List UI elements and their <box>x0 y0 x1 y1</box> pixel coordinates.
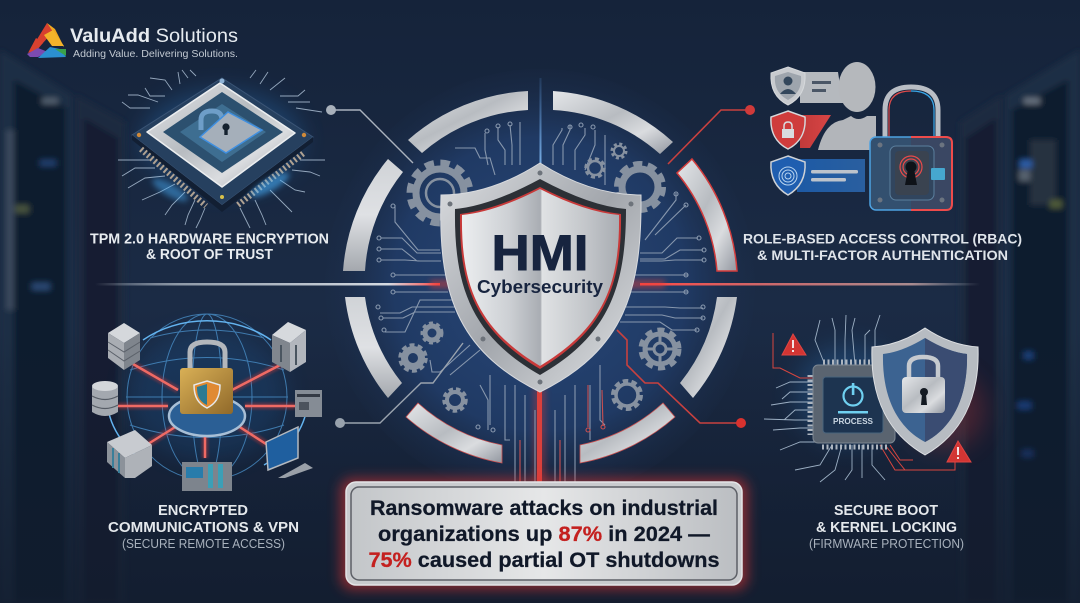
server stack top left <box>108 323 140 370</box>
blurred server racks right <box>960 50 1080 603</box>
callout line 2: organizations up 87% in 2024 — <box>378 523 710 546</box>
label: firmware protection: (FIRMWARE PROTECTION) <box>809 537 964 551</box>
label: encrypted: ENCRYPTED <box>158 503 248 519</box>
panel: TPM hardware encryption <box>90 70 329 263</box>
shield inner dark band <box>455 179 626 375</box>
shield metal face <box>462 189 619 366</box>
monitor and keyboard <box>266 427 313 478</box>
shield outer rim <box>441 163 641 392</box>
label: MFA: & MULTI-FACTOR AUTHENTICATION <box>757 247 1008 263</box>
HMI heading: HMI <box>492 225 588 281</box>
circuit traces around the shield <box>376 122 706 483</box>
gears <box>400 144 679 411</box>
icon: globe network with padlock <box>92 314 322 491</box>
shield red accent <box>460 187 621 369</box>
red circuit traces below the shield <box>520 385 605 483</box>
panel: secure boot <box>764 315 985 551</box>
process label: PROCESS <box>833 417 874 426</box>
callout line 3: 75% caused partial OT shutdowns <box>368 549 720 572</box>
database cylinder <box>92 381 118 416</box>
tagline: Adding Value. Delivering Solutions. <box>73 48 238 60</box>
label: TPM: TPM 2.0 HARDWARE ENCRYPTION <box>90 232 329 248</box>
Cybersecurity heading: Cybersecurity <box>477 276 604 297</box>
callout line 1: Ransomware attacks on industrial <box>370 497 718 520</box>
panel unit right <box>295 390 322 417</box>
label: RBAC: ROLE-BASED ACCESS CONTROL (RBAC) <box>743 230 1022 246</box>
label: secure remote access: (SECURE REMOTE ACCESS) <box>122 537 285 551</box>
icon: processor and shield <box>764 315 985 482</box>
connector: bottom left <box>335 343 463 428</box>
blurred server racks left <box>0 50 125 603</box>
connector: bottom right <box>617 330 746 428</box>
icon: chip with lock <box>118 70 325 228</box>
callout: ransomware statistic <box>340 478 748 590</box>
chip pins <box>141 149 305 206</box>
icon: logo triangle <box>27 23 66 58</box>
central shield <box>441 163 641 392</box>
control unit <box>182 462 232 491</box>
server pair top right <box>272 322 306 372</box>
logo: ValuAdd Solutions <box>27 23 238 60</box>
label: secure boot: SECURE BOOT <box>834 503 938 519</box>
connector: top right <box>668 105 755 164</box>
server row bottom left <box>107 430 152 478</box>
company name: ValuAdd Solutions <box>70 25 238 47</box>
rivets <box>448 170 634 384</box>
divider lines through the emblem <box>95 78 980 483</box>
panel: encrypted communications <box>92 314 322 551</box>
label: kernel locking: & KERNEL LOCKING <box>816 520 957 536</box>
panel: central emblem background <box>325 69 755 499</box>
ring segments <box>343 91 737 463</box>
label: root of trust: & ROOT OF TRUST <box>146 247 273 263</box>
panel: RBAC and MFA <box>743 62 1022 263</box>
processor pins <box>810 362 888 447</box>
icon: access control cards <box>771 62 952 210</box>
connector: top left <box>326 105 413 163</box>
label: communications and VPN: COMMUNICATIONS & VPN <box>108 520 299 536</box>
